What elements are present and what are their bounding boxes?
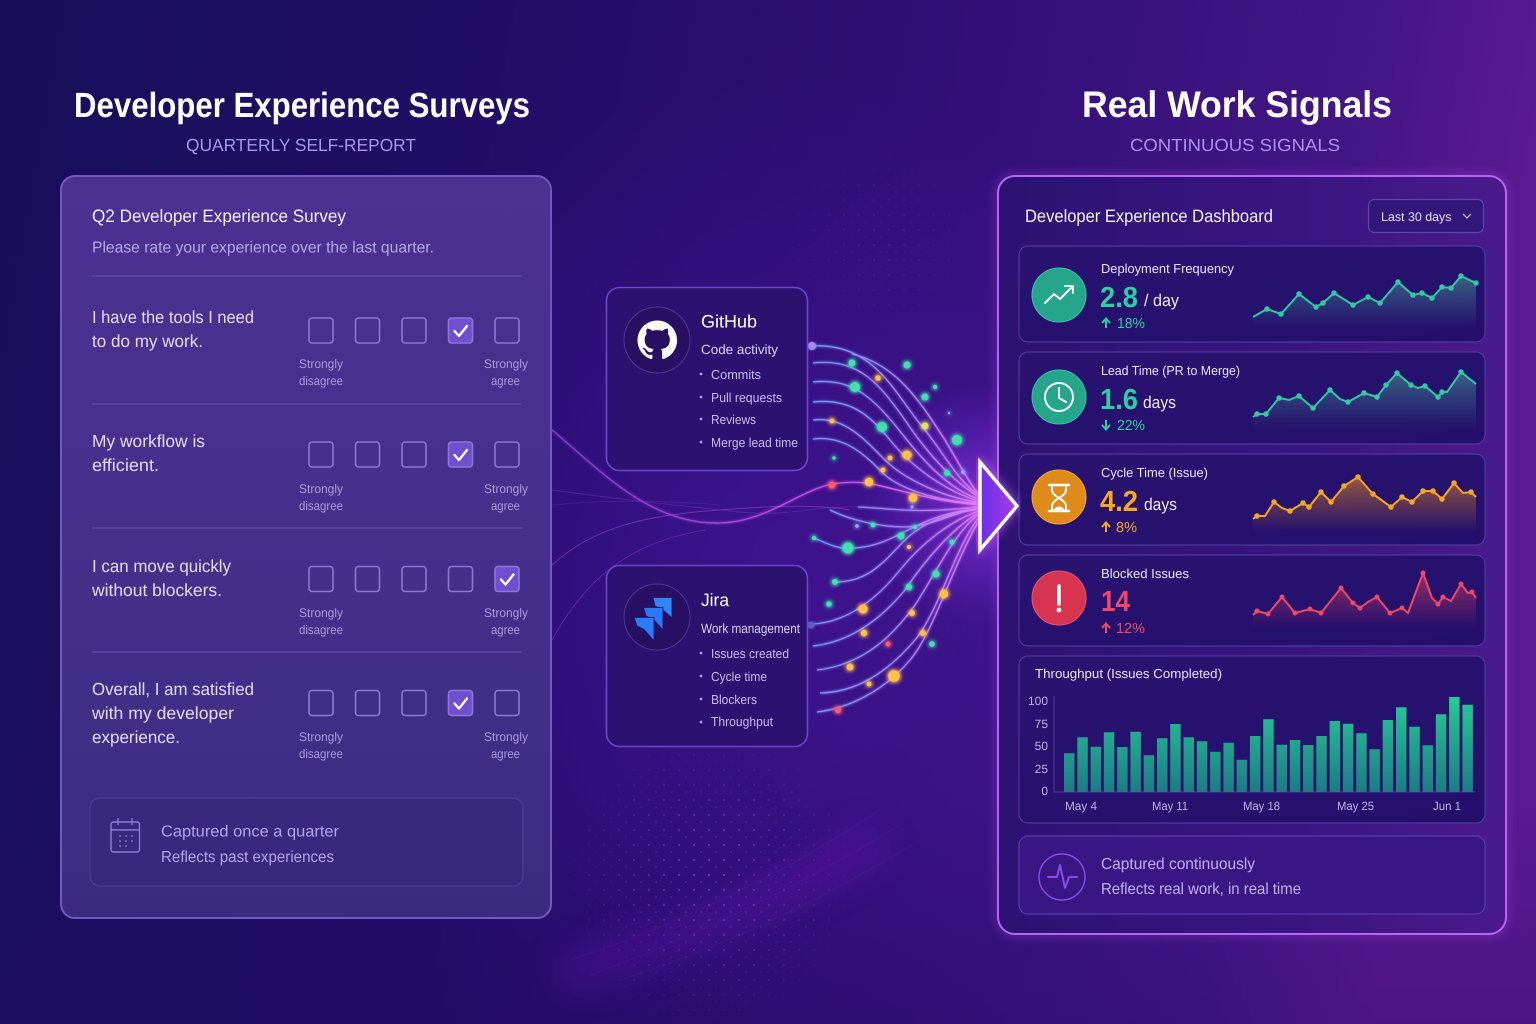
x axis labels — [1065, 799, 1461, 813]
question 2: Strongly — [299, 482, 344, 496]
metric: cycle time: Cycle Time (Issue) — [1101, 465, 1208, 480]
date dropdown: Last 30 days — [1381, 210, 1452, 224]
amber particles — [830, 375, 948, 686]
delta: up 8%: 8% — [1116, 520, 1137, 536]
delta: up 18% — [1102, 316, 1145, 332]
question 4: with my developer — [91, 703, 234, 723]
title: Developer Experience Surveys: Developer Experience Surveys — [74, 86, 530, 125]
question 4 — [91, 679, 529, 761]
chart: throughput: Throughput (Issues Completed) — [1035, 666, 1222, 681]
card: GitHub: Commits — [711, 367, 761, 382]
red particles — [828, 482, 890, 713]
flow glow behind arrow — [865, 385, 1105, 625]
metric: deployment frequency — [1019, 246, 1485, 342]
icon: alert — [1032, 571, 1086, 625]
question 3: agree — [491, 623, 520, 637]
delta: up 18%: 18% — [1117, 316, 1145, 332]
title: Developer Experience Surveys: QUARTERLY SELF-REPORT — [186, 135, 416, 155]
metric: lead time: days — [1143, 393, 1176, 412]
y axis labels — [1028, 694, 1048, 798]
metric: cycle time — [1019, 454, 1485, 545]
question 1: to do my work. — [92, 331, 203, 351]
date dropdown — [1368, 200, 1484, 232]
card: Jira: Blockers — [711, 692, 757, 707]
dashboard heading: Developer Experience Dashboard — [1025, 206, 1273, 226]
wisps from survey panel into the centre — [552, 490, 860, 640]
title: Real Work Signals — [1082, 84, 1392, 155]
sparkline: deployment frequency — [1253, 276, 1476, 328]
title: Real Work Signals: Real Work Signals — [1082, 84, 1392, 125]
question 1: Strongly — [299, 357, 344, 371]
connector node: GitHub — [808, 342, 816, 350]
delta: up 8% — [1102, 520, 1137, 536]
card: Jira: Cycle time — [711, 669, 767, 684]
y axis labels: 25 — [1035, 762, 1048, 776]
x axis labels: Jun 1 — [1433, 799, 1461, 813]
icon: GitHub — [638, 320, 677, 359]
x axis labels: May 18 — [1243, 799, 1280, 813]
question 3: without blockers. — [91, 580, 222, 600]
card: GitHub: Merge lead time — [711, 435, 798, 450]
question 2: My workflow is — [92, 431, 205, 451]
sparkline: lead time — [1253, 372, 1476, 430]
card: GitHub: Code activity — [701, 342, 778, 357]
metric: blocked issues — [1019, 555, 1485, 646]
question 3: Strongly — [299, 606, 344, 620]
x axis labels: May 25 — [1337, 799, 1374, 813]
survey subheading: Please rate your experience over the last quarter. — [92, 240, 434, 256]
x axis labels: May 4 — [1065, 799, 1097, 813]
metric: deployment frequency: 2.8 — [1100, 282, 1138, 314]
panel: dashboard — [998, 176, 1506, 934]
icon: Jira — [634, 598, 672, 641]
icon: clock — [1032, 370, 1086, 424]
question 2: disagree — [299, 499, 343, 513]
connector node: Jira — [808, 622, 814, 628]
metric: blocked issues: 14 — [1101, 586, 1130, 618]
card: Jira: Issues created — [711, 646, 789, 661]
y axis labels: 0 — [1041, 784, 1048, 798]
card: Jira: Work management — [701, 621, 800, 636]
delta: up 12%: 12% — [1116, 621, 1145, 637]
question 3: I can move quickly — [92, 556, 231, 576]
question 1: agree — [491, 374, 520, 388]
question 3: Strongly — [484, 606, 529, 620]
question 4: disagree — [299, 747, 343, 761]
card: GitHub: Reviews — [711, 412, 756, 427]
blue particles — [855, 412, 965, 528]
question 3 — [91, 556, 529, 637]
title: Real Work Signals: CONTINUOUS SIGNALS — [1130, 135, 1340, 155]
card: GitHub: Pull requests — [711, 390, 782, 405]
question 2: Strongly — [484, 482, 529, 496]
teal particles — [812, 360, 962, 647]
card: Jira: Throughput — [711, 714, 773, 729]
metric: cycle time: 4.2 — [1100, 486, 1138, 518]
question 1: I have the tools I need — [92, 307, 254, 327]
question 4: Strongly — [299, 730, 344, 744]
callout: captured once a quarter — [90, 798, 523, 886]
question 4: Overall, I am satisfied — [92, 679, 254, 699]
question 2 — [92, 431, 529, 513]
delta: up 12% — [1102, 621, 1145, 637]
card: Jira: Jira — [701, 590, 730, 610]
signal particles — [812, 360, 965, 713]
question 2: agree — [491, 499, 520, 513]
sparkline: cycle time — [1253, 477, 1476, 532]
question 4: agree — [491, 747, 520, 761]
delta: down 22%: 22% — [1117, 418, 1145, 434]
icon: hourglass — [1032, 470, 1086, 524]
bars — [1064, 697, 1473, 792]
metric: lead time — [1019, 352, 1485, 444]
callout: captured once a quarter: Captured once a quarter — [161, 824, 340, 840]
callout: captured continuously — [1019, 836, 1485, 914]
y axis labels: 75 — [1035, 717, 1048, 731]
metric: blocked issues: Blocked Issues — [1101, 566, 1189, 581]
card: GitHub: GitHub — [701, 312, 757, 332]
callout: captured once a quarter: Reflects past experiences — [161, 849, 334, 866]
question 3: disagree — [299, 623, 343, 637]
arrow — [980, 462, 1017, 550]
question 1: disagree — [299, 374, 343, 388]
y axis labels: 100 — [1028, 694, 1048, 708]
icon: calendar — [111, 818, 140, 852]
callout: captured continuously: Reflects real work, in real time — [1101, 881, 1301, 898]
card: GitHub — [606, 288, 808, 470]
metric: lead time: Lead Time (PR to Merge) — [1101, 363, 1240, 378]
sparkline: blocked issues — [1253, 573, 1476, 628]
question 2: efficient. — [92, 455, 159, 475]
question 1: Strongly — [484, 357, 529, 371]
question 4: Strongly — [484, 730, 529, 744]
metric: deployment frequency: Deployment Frequency — [1101, 261, 1234, 276]
metric: cycle time: days — [1144, 495, 1177, 514]
delta: down 22% — [1102, 418, 1145, 434]
callout: captured continuously: Captured continuously — [1101, 856, 1255, 873]
icon: pulse — [1039, 854, 1085, 900]
x axis labels: May 11 — [1152, 799, 1188, 813]
card: Jira — [606, 566, 808, 746]
metric: lead time: 1.6 — [1100, 384, 1138, 416]
y axis labels: 50 — [1035, 739, 1048, 753]
question 1 — [92, 307, 529, 388]
title: Developer Experience Surveys — [74, 86, 530, 155]
panel: survey — [61, 176, 551, 918]
metric: deployment frequency: / day — [1144, 291, 1179, 310]
survey heading: Q2 Developer Experience Survey — [92, 206, 346, 226]
question 4: experience. — [92, 727, 180, 747]
flow line crossing from the survey panel — [552, 430, 982, 523]
chart: throughput — [1019, 656, 1485, 823]
flow lines into the arrow — [812, 346, 982, 712]
icon: trend up — [1032, 268, 1086, 322]
